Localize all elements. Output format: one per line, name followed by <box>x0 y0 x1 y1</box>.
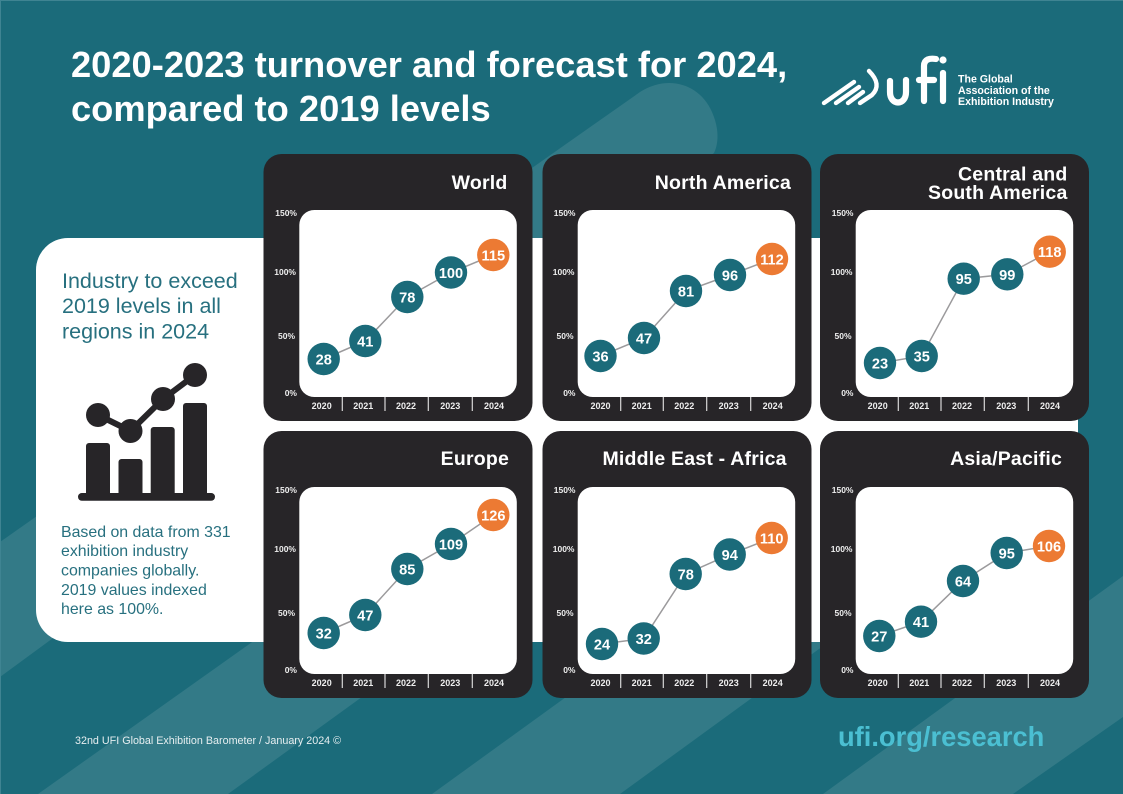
logo tagline: Association of the <box>958 85 1050 97</box>
summary note: 2019 values indexed <box>61 582 207 599</box>
panel: Europe: 126 <box>481 508 505 524</box>
panel: Europe: 150% <box>275 485 297 495</box>
panel: Central and South America: 2022 <box>952 401 972 411</box>
summary heading: Industry to exceed <box>62 269 238 293</box>
panel: Central and South America: 2024 <box>1040 401 1060 411</box>
panel: World: 2023 <box>440 401 460 411</box>
icon: bar chart with trend line <box>78 363 215 501</box>
panel: North America: 96 <box>722 268 738 284</box>
panel: Europe: 50% <box>278 608 295 618</box>
panel: Central and South America: 0% <box>841 388 854 398</box>
panel: North America: 2023 <box>719 401 739 411</box>
panel: North America <box>542 154 812 421</box>
panel: Central and South America: 118 <box>1038 245 1061 261</box>
panel: World <box>264 154 532 421</box>
panel: North America: 47 <box>636 332 652 348</box>
panel: North America: 2022 <box>674 401 694 411</box>
panel: Central and South America <box>820 154 1089 421</box>
panel: Central and South America: 150% <box>832 208 854 218</box>
panel: Asia/Pacific: 2020 <box>868 678 888 688</box>
panel: North America: 81 <box>678 284 694 300</box>
panel: North America: 0% <box>563 388 576 398</box>
summary heading: 2019 levels in all <box>62 294 221 318</box>
panel: Europe: 2022 <box>396 678 416 688</box>
panel: Central and South America: 2020 <box>868 401 888 411</box>
footer source: 32nd UFI Global Exhibition Barometer / January 2024 © <box>75 735 341 747</box>
panel: Middle East - Africa: 2020 <box>590 678 611 688</box>
panel: Middle East - Africa: 100% <box>553 544 575 554</box>
panel: Middle East - Africa: 150% <box>554 485 576 495</box>
panel: Middle East - Africa: 2022 <box>674 678 694 688</box>
panel: Middle East - Africa: 78 <box>678 568 694 584</box>
panel: white summary card <box>36 238 1078 642</box>
panel: Central and South America: 23 <box>872 356 888 372</box>
panel: Asia/Pacific: 2021 <box>909 678 929 688</box>
panel: Europe: 2020 <box>312 678 332 688</box>
panel: Europe: 0% <box>285 665 297 675</box>
panel: Middle East - Africa <box>542 431 812 698</box>
panel: World: World <box>452 172 508 194</box>
icon: logo wing <box>824 71 877 103</box>
panel: North America: 112 <box>760 252 784 268</box>
panel: North America: 2024 <box>763 401 783 411</box>
panel: Europe <box>264 431 532 698</box>
panel: Europe: 47 <box>357 608 373 624</box>
panel: North America: 2020 <box>590 401 611 411</box>
panel: Europe: 2024 <box>484 678 504 688</box>
panel: Europe: 2023 <box>440 678 460 688</box>
panel: World: 78 <box>399 290 415 306</box>
panel: Middle East - Africa: 32 <box>636 632 652 648</box>
panel: Middle East - Africa: 94 <box>722 548 739 564</box>
panel: Asia/Pacific: 100% <box>831 544 853 554</box>
panel: World: 2022 <box>396 401 416 411</box>
summary note: exhibition industry <box>61 543 188 560</box>
panel: North America: North America <box>655 172 791 194</box>
summary note: here as 100%. <box>61 601 163 618</box>
panel: Central and South America: 2023 <box>996 401 1016 411</box>
panel: North America: 2021 <box>632 401 652 411</box>
logo tagline: The Global <box>958 74 1013 86</box>
UFI logo <box>824 56 1054 108</box>
panel: Asia/Pacific: 0% <box>841 665 854 675</box>
panel: World: 28 <box>316 352 332 368</box>
panel: World: 0% <box>285 388 297 398</box>
panel: World: 41 <box>357 334 373 350</box>
panel: World: 100 <box>439 266 463 282</box>
panel: Middle East - Africa: 0% <box>563 665 576 675</box>
panel: Europe: 100% <box>274 544 296 554</box>
panel: World: 100% <box>274 267 296 277</box>
panel: World: 2020 <box>312 401 332 411</box>
panel: Europe: 2021 <box>353 678 373 688</box>
panel: Europe: 32 <box>316 626 332 642</box>
panel: Asia/Pacific: Asia/Pacific <box>950 448 1062 470</box>
panel: Central and South America: 100% <box>831 267 853 277</box>
panel: Asia/Pacific: 95 <box>999 546 1015 562</box>
panel: World: 50% <box>278 331 295 341</box>
panel: North America: 100% <box>553 267 575 277</box>
summary note: companies globally. <box>61 562 199 580</box>
summary note: Based on data from 331 <box>61 524 231 541</box>
panel: Central and South America: 95 <box>956 272 972 288</box>
panel: World: 115 <box>482 248 505 264</box>
panel: Europe: 85 <box>399 562 415 578</box>
panel: Central and South America: 50% <box>834 331 852 341</box>
panel: Europe: Europe <box>441 448 509 470</box>
panel: Central and South America: 99 <box>999 268 1015 284</box>
panel: Central and South America: South America <box>928 182 1068 204</box>
panel: North America: 50% <box>556 331 574 341</box>
panel: Middle East - Africa: 110 <box>760 532 783 548</box>
panel: Central and South America: 2021 <box>909 401 929 411</box>
panel: Middle East - Africa: 2024 <box>763 678 783 688</box>
panel: Middle East - Africa: Middle East - Africa <box>602 448 787 470</box>
panel: Middle East - Africa: 24 <box>594 638 611 654</box>
panel: Asia/Pacific: 150% <box>832 485 854 495</box>
panel: Asia/Pacific: 64 <box>955 574 972 590</box>
panel: Asia/Pacific: 27 <box>871 630 887 646</box>
panel: Asia/Pacific <box>820 431 1089 698</box>
panel: Asia/Pacific: 2023 <box>996 678 1016 688</box>
panel: World: 2021 <box>353 401 373 411</box>
panel: Asia/Pacific: 50% <box>834 608 852 618</box>
panel: Asia/Pacific: 106 <box>1037 540 1061 556</box>
panel: North America: 150% <box>554 208 576 218</box>
panel: Middle East - Africa: 50% <box>556 608 574 618</box>
logo letters <box>890 59 943 102</box>
title: compared to 2019 levels <box>71 88 491 129</box>
panel: Asia/Pacific: 41 <box>913 615 929 631</box>
panel: North America: 36 <box>592 350 609 366</box>
panel: Middle East - Africa: 2021 <box>632 678 652 688</box>
title: 2020-2023 turnover and forecast for 2024, <box>71 44 787 85</box>
panel: Asia/Pacific: 2022 <box>952 678 972 688</box>
panel: Middle East - Africa: 2023 <box>719 678 739 688</box>
summary heading: regions in 2024 <box>62 320 209 344</box>
panel: Central and South America: 35 <box>914 350 930 366</box>
logo tagline: Exhibition Industry <box>958 96 1054 108</box>
panel: Europe: 109 <box>439 538 463 554</box>
panel: Asia/Pacific: 2024 <box>1040 678 1060 688</box>
panel: Central and South America: Central and <box>958 164 1068 186</box>
panel: World: 2024 <box>484 401 504 411</box>
footer link: ufi.org/research <box>838 721 1044 752</box>
panel: World: 150% <box>275 208 297 218</box>
